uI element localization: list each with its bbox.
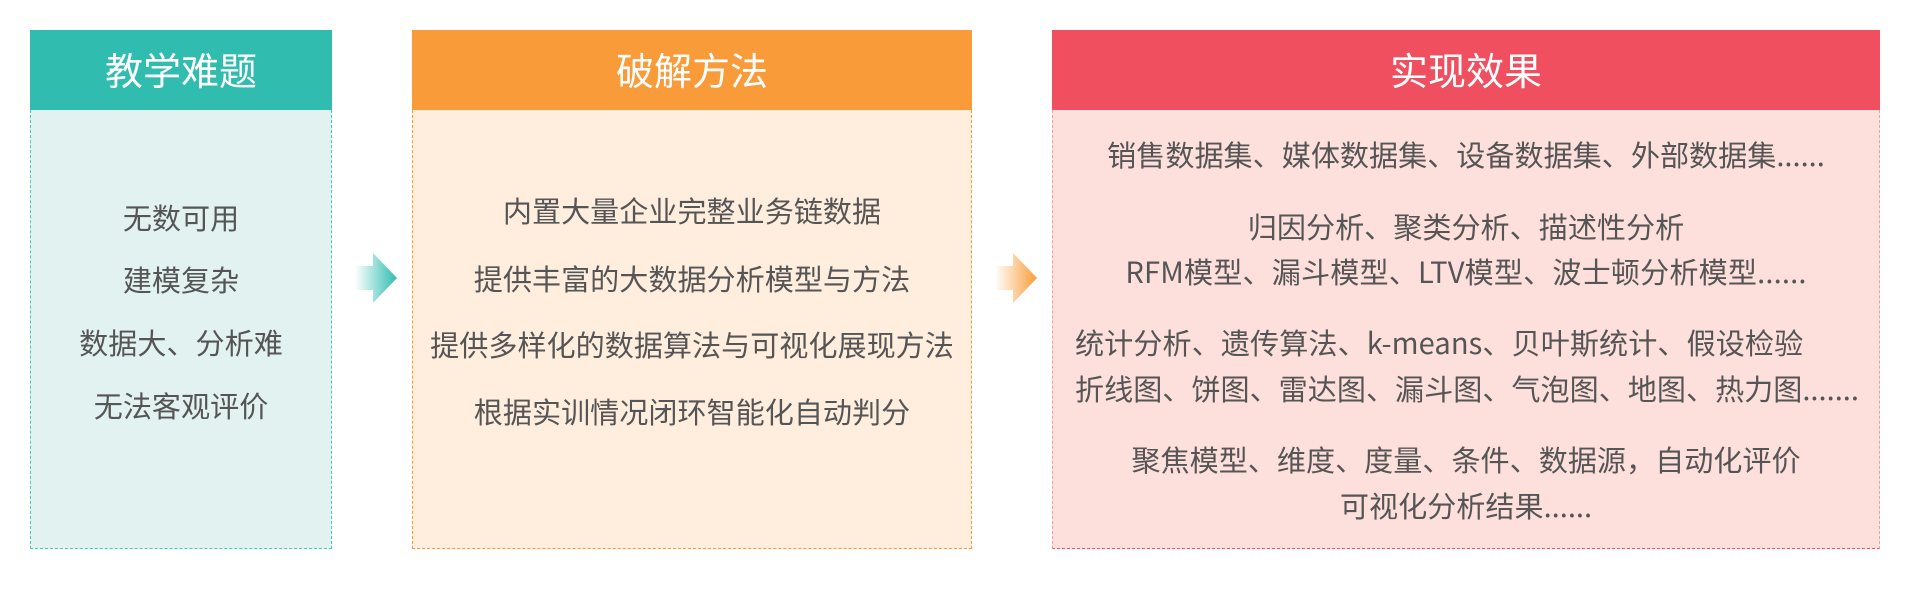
text: big data: 数据大、分析难 bbox=[79, 321, 283, 363]
heading: outcomes bbox=[1052, 30, 1880, 110]
text: evaluation: 聚焦模型、维度、度量、条件、数据源，自动化评价 bbox=[1131, 438, 1801, 480]
text: no data: 无数可用 bbox=[123, 196, 239, 238]
text: evaluation: 无法客观评价 bbox=[94, 384, 268, 426]
panel body: solutions list bbox=[412, 110, 972, 549]
text: solution 2: 提供丰富的大数据分析模型与方法 bbox=[474, 257, 910, 299]
text: solution 4: 根据实训情况闭环智能化自动判分 bbox=[474, 390, 910, 432]
text: solution 1: 内置大量企业完整业务链数据 bbox=[503, 189, 881, 231]
heading: solutions bbox=[412, 30, 972, 110]
panel: outcomes bbox=[1052, 30, 1880, 549]
text: visual results: 可视化分析结果...... bbox=[1340, 484, 1592, 526]
text: models: RFM模型、漏斗模型、LTV模型、波士顿分析模型...... bbox=[1125, 250, 1807, 292]
panel body: problems list bbox=[30, 110, 332, 549]
panel: teaching problems bbox=[30, 30, 332, 549]
heading: outcomes: 实现效果 bbox=[1390, 41, 1542, 96]
heading: solutions: 破解方法 bbox=[616, 41, 768, 96]
heading: teaching problems bbox=[30, 30, 332, 110]
text: solution 3: 提供多样化的数据算法与可视化展现方法 bbox=[430, 323, 954, 365]
text: complex modeling: 建模复杂 bbox=[123, 258, 239, 300]
text: analysis types: 归因分析、聚类分析、描述性分析 bbox=[1248, 205, 1684, 247]
text: charts: 折线图、饼图、雷达图、漏斗图、气泡图、地图、热力图....... bbox=[1075, 367, 1859, 409]
text: algorithms: 统计分析、遗传算法、k-means、贝叶斯统计、假设检验 bbox=[1075, 321, 1803, 363]
arrow: teal bbox=[356, 253, 397, 303]
text: datasets: 销售数据集、媒体数据集、设备数据集、外部数据集...... bbox=[1107, 133, 1825, 175]
panel body: outcomes list bbox=[1052, 110, 1880, 549]
panel: solutions bbox=[412, 30, 972, 549]
heading: teaching problems: 教学难题 bbox=[105, 41, 257, 96]
arrow: orange bbox=[997, 253, 1037, 303]
